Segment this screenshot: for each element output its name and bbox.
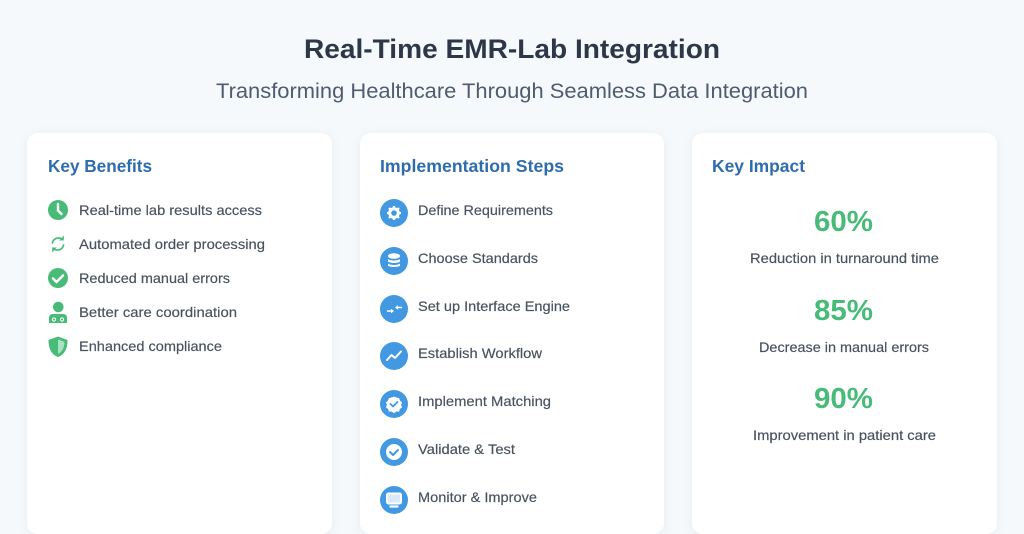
step: choose standards: Choose Standards bbox=[418, 250, 538, 266]
stat: 85 percent: 85% bbox=[814, 295, 873, 327]
step: set up interface engine bbox=[380, 295, 570, 323]
benefit: automated order processing: Automated order processing bbox=[79, 236, 265, 252]
benefit: real-time lab results access: Real-time lab results access bbox=[79, 202, 262, 218]
stat: 60 percent bbox=[750, 206, 939, 266]
benefit: real-time lab results access bbox=[48, 200, 262, 220]
panel: implementation steps bbox=[360, 133, 664, 534]
stat: 90 percent: 90% bbox=[814, 383, 873, 415]
step: implement matching: Implement Matching bbox=[418, 393, 551, 409]
step: establish workflow: Establish Workflow bbox=[418, 345, 543, 361]
stat: 90 percent bbox=[753, 383, 936, 443]
panel: key impact bbox=[692, 133, 997, 534]
benefit: reduced manual errors: Reduced manual errors bbox=[79, 270, 230, 286]
step: validate and test: Validate & Test bbox=[418, 441, 515, 457]
step: monitor and improve bbox=[380, 486, 537, 514]
heading: implementation steps: Implementation Steps bbox=[380, 156, 564, 176]
benefit: better care coordination bbox=[49, 302, 237, 323]
panel: key benefits bbox=[27, 133, 332, 534]
benefit: enhanced compliance bbox=[48, 336, 222, 357]
stat: 60 percent: Reduction in turnaround time bbox=[750, 250, 939, 266]
stat: 85 percent bbox=[759, 295, 929, 355]
step: define requirements bbox=[380, 199, 553, 227]
benefit: enhanced compliance: Enhanced compliance bbox=[79, 338, 222, 354]
benefit: better care coordination: Better care coordination bbox=[79, 304, 237, 320]
step: validate and test bbox=[380, 438, 515, 466]
step: define requirements: Define Requirements bbox=[418, 202, 553, 218]
step: choose standards bbox=[380, 247, 538, 275]
heading: key benefits: Key Benefits bbox=[48, 156, 152, 176]
step: set up interface engine: Set up Interface Engine bbox=[418, 298, 570, 314]
stat: 85 percent: Decrease in manual errors bbox=[759, 339, 929, 355]
heading: key impact: Key Impact bbox=[712, 156, 805, 176]
step: establish workflow bbox=[380, 342, 543, 370]
step: implement matching bbox=[380, 390, 551, 418]
stat: 60 percent: 60% bbox=[814, 206, 873, 238]
title: Real-Time EMR-Lab Integration bbox=[304, 34, 720, 64]
subtitle: Transforming Healthcare Through Seamless Data Integration bbox=[216, 80, 808, 103]
benefit: reduced manual errors bbox=[48, 268, 230, 288]
step: monitor and improve: Monitor & Improve bbox=[418, 489, 537, 505]
stat: 90 percent: Improvement in patient care bbox=[753, 427, 936, 443]
